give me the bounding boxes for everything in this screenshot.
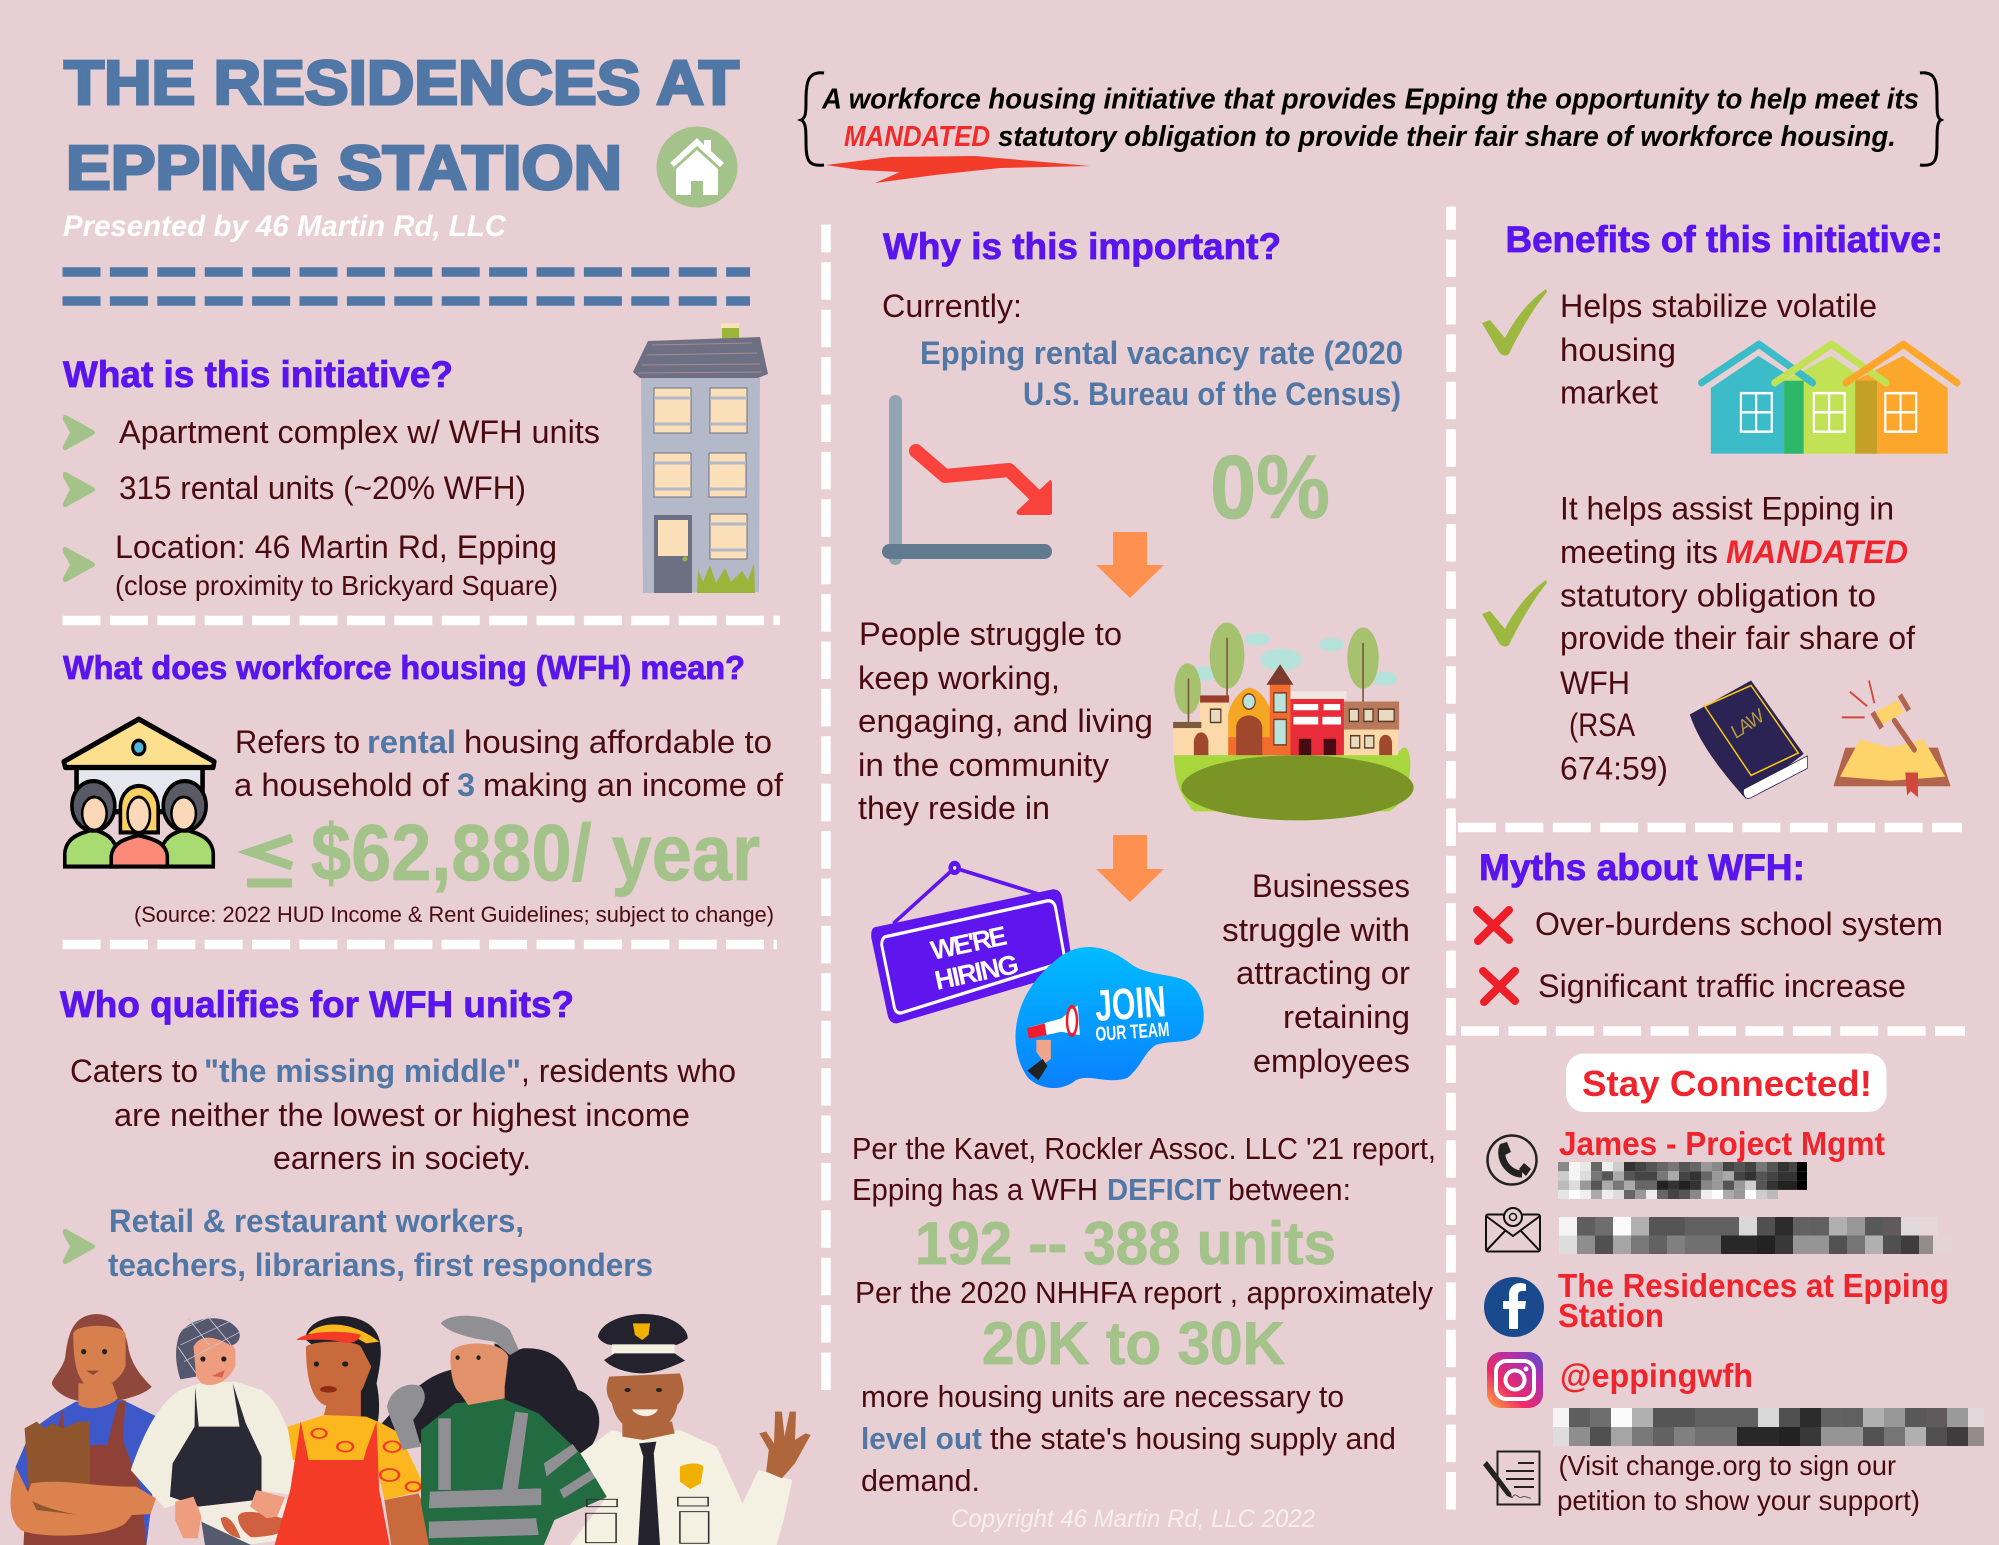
benefit text one: [1560, 288, 1877, 410]
mandated word: MANDATED: [844, 121, 990, 153]
chart: declining arrow: [882, 395, 1052, 565]
arrow: down two: [1096, 835, 1164, 902]
vacancy figure: 0%: [1210, 438, 1330, 538]
petition text: [1557, 1450, 1920, 1516]
definition line 1: rental: [367, 724, 456, 760]
icon: red cross two: [1483, 971, 1515, 1002]
bullet text 2: 315 rental units (~20% WFH): [119, 470, 526, 506]
heading: What does workforce housing (WFH) mean?: [63, 649, 745, 686]
sign: we are hiring: HIRING: [932, 949, 1021, 996]
worker: restaurant server: [275, 1316, 442, 1545]
redacted phone number: [1558, 1162, 1807, 1199]
description line 1: , residents who: [521, 1053, 736, 1089]
double dashed rule: [62, 272, 750, 301]
definition line 1: Refers to: [235, 724, 360, 760]
icon: envelope with at sign: [1486, 1208, 1540, 1252]
bullet arrow 3: [63, 547, 95, 582]
definition line 2: [234, 767, 783, 803]
definition line 1: housing affordable to: [464, 724, 772, 760]
facebook page name: [1558, 1267, 1949, 1334]
icon: apartment building: [633, 323, 768, 593]
pill heading: Stay Connected!: [1582, 1063, 1872, 1104]
definition line 2: a household of: [234, 767, 449, 803]
benefit text two: 674:59): [1560, 750, 1668, 786]
benefit text two: statutory obligation to: [1560, 578, 1876, 614]
description line 1: Caters to: [70, 1053, 198, 1089]
benefit text two: meeting its: [1560, 534, 1718, 570]
bullet arrow 2: [63, 472, 95, 507]
icon: three colored houses: [1701, 344, 1957, 454]
sign: join our team: OUR TEAM: [1095, 1019, 1170, 1046]
source note: (Source: 2022 HUD Income & Rent Guidelines; subject to change): [134, 902, 774, 927]
consequence text: businesses: struggle with: [1222, 912, 1410, 948]
consequence text: people: [858, 616, 1153, 826]
benefit text two: WFH: [1560, 665, 1630, 701]
benefit text one: housing: [1560, 332, 1676, 368]
title line 1: THE RESIDENCES AT: [64, 49, 739, 118]
bullet text 1: Apartment complex w/ WFH units: [119, 414, 600, 450]
consequence text: businesses: retaining: [1283, 999, 1410, 1035]
icon: family under roof: [64, 719, 214, 867]
right brace: [1920, 73, 1941, 165]
heading: What is this initiative?: [63, 354, 453, 395]
rule: white dashed divider three: [1458, 823, 1962, 832]
description line 1: [70, 1053, 736, 1089]
panel: why is this important: [852, 226, 1436, 1533]
vacancy label line 2: U.S. Bureau of the Census): [1023, 376, 1401, 412]
title line 2: EPPING STATION: [66, 134, 622, 203]
panel: myths: [1477, 847, 1943, 1004]
rule: white dashed divider one: [62, 616, 780, 625]
sign: we are hiring: WE'RE: [928, 921, 1010, 966]
header: title block: [62, 49, 750, 301]
redacted petition link: [1553, 1408, 1984, 1446]
description line 1: "the missing middle": [204, 1053, 521, 1089]
illustration: village on a hill: [1173, 622, 1414, 820]
supply text: level out: [861, 1421, 982, 1456]
illustration: five workers: [10, 1314, 811, 1545]
consequence text: people: in the community: [858, 747, 1109, 783]
description line 2: are neither the lowest or highest income: [114, 1097, 690, 1133]
benefit text two: [1560, 490, 1915, 786]
occupations line 1: Retail & restaurant workers,: [109, 1203, 524, 1239]
icon: law book: [1690, 680, 1807, 799]
worker: sanitation worker: [382, 1316, 608, 1545]
icon: signed petition: [1483, 1452, 1540, 1504]
benefit text two: It helps assist Epping in: [1560, 490, 1894, 526]
heading: Who qualifies for WFH units?: [60, 984, 574, 1025]
instagram handle: @eppingwfh: [1560, 1357, 1753, 1394]
consequence text: people: People struggle to: [859, 616, 1122, 652]
consequence text: businesses: [1222, 868, 1410, 1079]
bullet text 3 note: (close proximity to Brickyard Square): [115, 570, 558, 601]
red brush underline: [826, 156, 1090, 183]
sign: join our team: JOIN: [1093, 977, 1168, 1031]
copyright: Copyright 46 Martin Rd, LLC 2022: [951, 1505, 1315, 1533]
icon: gavel on open book: [1833, 680, 1951, 797]
consequence text: people: engaging, and living: [858, 703, 1153, 739]
petition text: (Visit change.org to sign our: [1558, 1450, 1896, 1481]
panel: stay connected: [1483, 1054, 1984, 1516]
deficit text: Per the Kavet, Rockler Assoc. LLC '21 report,: [852, 1131, 1436, 1166]
definition line 1: [235, 724, 772, 760]
panel: who qualifies: [10, 984, 811, 1545]
petition text: petition to show your support): [1557, 1485, 1920, 1516]
bullet text 3: Location: 46 Martin Rd, Epping: [115, 529, 557, 565]
icon: phone: [1488, 1136, 1536, 1184]
icon: instagram: [1487, 1352, 1543, 1408]
rule: white dashed column divider left: [821, 224, 831, 1390]
pill heading: [1566, 1054, 1886, 1112]
benefit text one: Helps stabilize volatile: [1560, 288, 1877, 324]
statement line 1: A workforce housing initiative that provides Epping the opportunity to help meet its: [821, 84, 1919, 116]
contact name: James - Project Mgmt: [1559, 1125, 1885, 1162]
occupations line 2: teachers, librarians, first responders: [108, 1247, 653, 1283]
benefit text two: (RSA: [1569, 707, 1636, 743]
redacted email: [1559, 1217, 1951, 1254]
rule: white dashed divider two: [62, 940, 777, 949]
bullet arrow 1: [63, 415, 95, 450]
icon: facebook: [1484, 1277, 1544, 1337]
NHHFA figure: 20K to 30K: [982, 1310, 1285, 1377]
consequence text: businesses: employees: [1253, 1043, 1410, 1079]
rule: white dashed divider four: [1461, 1026, 1965, 1036]
definition line 2: 3: [457, 767, 475, 803]
description line 3: earners in society.: [273, 1140, 531, 1176]
left brace: [801, 73, 824, 165]
myth text one: Over-burdens school system: [1535, 906, 1943, 942]
banner: initiative statement: [801, 73, 1941, 183]
consequence text: businesses: attracting or: [1236, 955, 1410, 991]
heading: Why is this important?: [883, 226, 1281, 267]
worker: grocery clerk: [10, 1314, 157, 1545]
consequence text: businesses: Businesses: [1252, 868, 1410, 904]
supply text: more housing units are necessary to: [861, 1379, 1344, 1414]
panel: what does WFH mean: [63, 649, 783, 927]
benefit text one: market: [1560, 374, 1658, 410]
heading: Benefits of this initiative:: [1506, 219, 1943, 260]
supply text: the state's housing supply and: [990, 1421, 1396, 1456]
consequence text: people: they reside in: [858, 790, 1050, 826]
sign: we are hiring: [871, 861, 1074, 1023]
icon: law book: LAW: [1728, 704, 1767, 743]
icon: check mark two: [1482, 580, 1547, 647]
panel: benefits: [1482, 219, 1957, 799]
icon: green house badge: [656, 126, 738, 208]
icon: red cross one: [1477, 910, 1509, 941]
heading: Myths about WFH:: [1479, 847, 1805, 888]
income figure: $62,880/ year: [311, 808, 760, 897]
deficit text: [852, 1131, 1436, 1207]
supply text: [861, 1379, 1396, 1498]
benefit text two: provide their fair share of: [1560, 620, 1915, 656]
supply text: demand.: [861, 1463, 980, 1498]
arrow: down one: [1096, 532, 1164, 598]
subtitle: Presented by 46 Martin Rd, LLC: [63, 210, 507, 243]
rule: white dashed column divider right: [1446, 207, 1456, 1510]
definition line 2: making an income of: [483, 767, 783, 803]
icon: check mark one: [1482, 289, 1547, 356]
deficit text: DEFICIT: [1107, 1172, 1221, 1207]
statement line 2: statutory obligation to provide their fair share of workforce housing.: [998, 121, 1896, 153]
worker: security officer: [570, 1314, 811, 1545]
facebook page name: Station: [1558, 1297, 1664, 1334]
deficit text: Epping has a WFH: [852, 1172, 1098, 1207]
panel: what is this initiative: [63, 323, 768, 601]
NHHFA text: Per the 2020 NHHFA report , approximately: [855, 1275, 1433, 1310]
vacancy label line 1: Epping rental vacancy rate (2020: [920, 335, 1403, 371]
consequence text: people: keep working,: [858, 660, 1060, 696]
myth text two: Significant traffic increase: [1538, 968, 1906, 1004]
deficit figure: 192 -- 388 units: [915, 1210, 1336, 1277]
worker: chef: [131, 1315, 306, 1545]
facebook page name: The Residences at Epping: [1558, 1267, 1949, 1304]
bullet arrow: [63, 1229, 95, 1264]
currently label: Currently:: [882, 288, 1022, 324]
benefit text two: MANDATED: [1726, 534, 1908, 570]
deficit text: between:: [1228, 1172, 1351, 1207]
sign: join our team: [1016, 947, 1204, 1088]
